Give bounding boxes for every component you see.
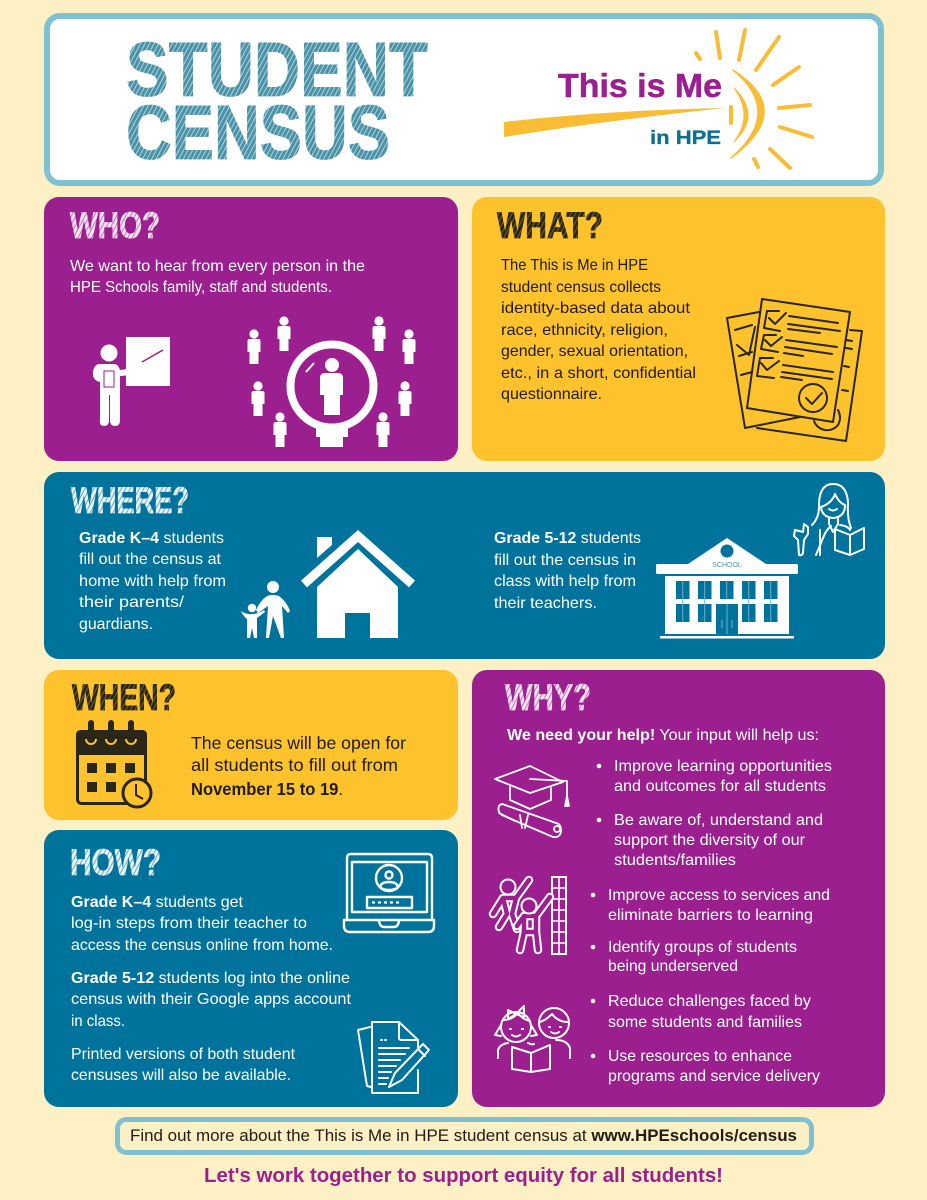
- heading: why: WHY?: [505, 677, 591, 718]
- text: how: censuses will also be available.: [71, 1067, 291, 1084]
- icon: graduation cap and diploma: [495, 766, 569, 837]
- tagline: Let's work together to support equity for all students!: [204, 1164, 723, 1187]
- text: grade 5-12 in class: [494, 530, 641, 612]
- icon: house: [304, 536, 412, 638]
- icon: children reading: [495, 1006, 570, 1072]
- text: reasons group 2: being underserved: [608, 958, 738, 975]
- text: reasons group 2: Identify groups of students: [608, 939, 797, 956]
- text: grade k-4 at home: home with help from: [79, 573, 226, 590]
- text: who: HPE Schools family, staff and students.: [70, 279, 332, 296]
- callout: find out more: [118, 1120, 812, 1152]
- text: reasons group 2: Improve access to services and: [608, 887, 830, 904]
- text: grade 5-12 in class: Grade 5-12 students: [494, 530, 641, 547]
- text: reasons group 1: and outcomes for all students: [614, 778, 826, 795]
- text: reasons group 3: Use resources to enhance: [608, 1048, 792, 1065]
- panel: how: [44, 830, 458, 1107]
- icon: teacher with book: [794, 484, 864, 555]
- icon: people around magnifier: [248, 316, 416, 447]
- text: grade 5-12 in class: their teachers.: [494, 595, 597, 612]
- text: what: The This is Me in HPE: [501, 257, 648, 274]
- text: how: Grade 5-12 students log into the online: [71, 970, 350, 987]
- text: reasons group 3: Reduce challenges faced by: [608, 993, 811, 1010]
- panel: what: [472, 197, 885, 461]
- text: grade 5-12 in class: class with help from: [494, 573, 636, 590]
- icon: children climbing wall: [493, 877, 566, 954]
- text: how: Printed versions of both student: [71, 1046, 296, 1063]
- icon: school: [656, 538, 798, 638]
- text: grade k-4 at home: Grade K–4 students: [79, 530, 224, 547]
- text: grade k-4 at home: guardians.: [79, 616, 153, 633]
- logo: This is Me in HPE: in HPE: [650, 128, 721, 149]
- callout: find out more: Find out more about the This is Me in HPE student census at www.HPEschools/census: [130, 1126, 797, 1145]
- text: reasons group 1: [597, 758, 832, 869]
- title: [126, 27, 428, 176]
- title: CENSUS: [126, 90, 390, 176]
- text: reasons group 2: [591, 887, 830, 975]
- text: what: student census collects: [501, 279, 661, 296]
- text: grade k-4 at home: fill out the census at: [79, 551, 222, 568]
- text: reasons group 2: eliminate barriers to learning: [608, 907, 813, 924]
- text: who: [70, 258, 365, 296]
- heading: where: WHERE?: [71, 480, 189, 521]
- text: when: all students to fill out from: [191, 755, 398, 775]
- text: how: census with their Google apps account: [71, 991, 352, 1008]
- text: reasons group 3: [591, 993, 820, 1085]
- text: reasons group 1: Improve learning opportunities: [614, 758, 832, 775]
- text: grade k-4 at home: [79, 530, 226, 633]
- text: what: [501, 257, 696, 403]
- icon: calendar: [76, 723, 151, 807]
- icon: presenter: [93, 337, 170, 426]
- panel: header: [47, 16, 881, 183]
- title: STUDENT: [126, 27, 428, 113]
- text: how: access the census online from home.: [71, 937, 333, 954]
- text: how: [71, 894, 352, 1084]
- text: reasons group 1: support the diversity of our: [614, 832, 806, 849]
- text: what: questionnaire.: [501, 386, 602, 403]
- icon: parent and child: [241, 581, 290, 638]
- text: reasons group 3: some students and families: [608, 1014, 802, 1031]
- logo: This is Me in HPE: [504, 30, 812, 168]
- text: when: November 15 to 19.: [191, 779, 343, 799]
- text: reasons group 1: Be aware of, understand and: [614, 812, 823, 829]
- icon: document and pencil: [358, 1022, 429, 1093]
- heading: what: WHAT?: [497, 205, 603, 246]
- text: who: We want to hear from every person in the: [70, 258, 365, 275]
- text: how: log-in steps from their teacher to: [71, 915, 307, 932]
- text: intro: We need your help! Your input will help us:: [507, 727, 819, 744]
- text: grade 5-12 in class: fill out the census in: [494, 552, 636, 569]
- text: when: [191, 733, 406, 799]
- icon: checklist papers: [727, 299, 862, 441]
- heading: who: WHO?: [70, 205, 160, 246]
- text: how: in class.: [71, 1013, 125, 1030]
- panel: when: [44, 670, 458, 820]
- text: when: The census will be open for: [191, 733, 406, 753]
- heading: how: HOW?: [70, 842, 161, 883]
- icon: school: SCHOOL: [712, 562, 742, 569]
- text: what: identity-based data about: [501, 300, 691, 317]
- text: reasons group 1: students/families: [614, 852, 736, 869]
- text: reasons group 3: programs and service delivery: [608, 1068, 820, 1085]
- text: grade k-4 at home: their parents/: [79, 594, 185, 611]
- logo: This is Me in HPE: This is Me: [558, 67, 722, 104]
- text: what: race, ethnicity, religion,: [501, 322, 668, 339]
- text: what: etc., in a short, confidential: [501, 365, 696, 382]
- panel: where: [44, 472, 885, 659]
- heading: when: WHEN?: [72, 677, 176, 718]
- text: how: Grade K–4 students get: [71, 894, 244, 911]
- panel: who: [44, 197, 458, 461]
- icon: laptop login: [344, 854, 434, 932]
- panel: why: [472, 670, 885, 1107]
- text: what: gender, sexual orientation,: [501, 343, 688, 360]
